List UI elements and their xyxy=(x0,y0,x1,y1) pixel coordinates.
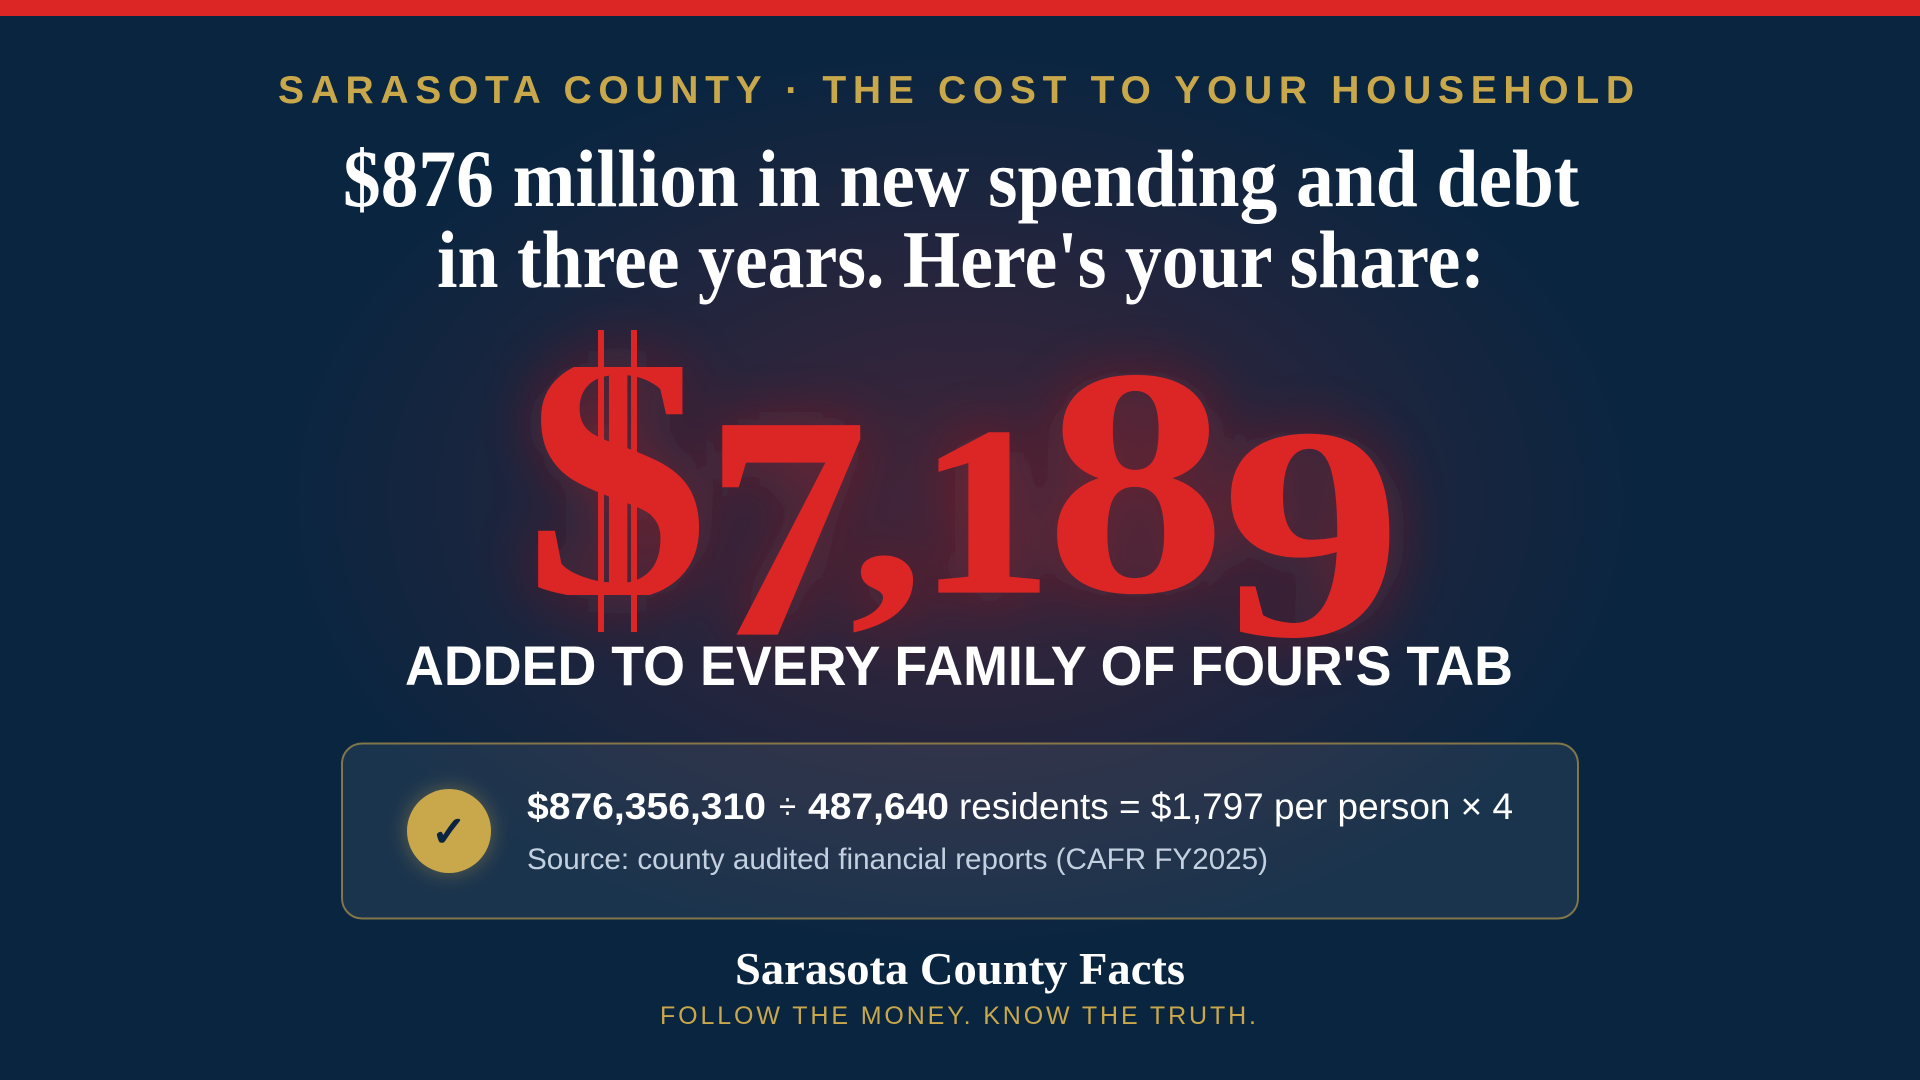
main headline: in three years. Here's your share: xyxy=(437,214,1485,305)
calculation text: 487,640 xyxy=(808,786,949,827)
calculation text: $876,356,310 xyxy=(527,786,766,827)
subheading: ADDED TO EVERY FAMILY OF FOUR'S TAB xyxy=(405,634,1513,697)
eyebrow heading: SARASOTA COUNTY · THE COST TO YOUR HOUSEHOLD xyxy=(278,69,1634,112)
calculation text: residents = $1,797 per person × 4 xyxy=(959,786,1513,827)
big number: $7,189: 7 xyxy=(706,352,867,701)
big number: $7,189: 9 xyxy=(1221,365,1403,701)
calculation text: ÷ xyxy=(779,786,796,827)
icon: gold check badge: ✓ xyxy=(431,807,467,856)
icon: gold check badge xyxy=(407,789,491,873)
big number: $7,189: 1 xyxy=(919,380,1052,643)
card box xyxy=(342,744,1578,918)
big number: $7,189: 8 xyxy=(1045,301,1227,662)
panel: calculation card xyxy=(342,744,1578,918)
big number: $7,189: $ xyxy=(525,275,710,674)
calculation text xyxy=(527,786,1513,827)
footer brand name: Sarasota County Facts xyxy=(735,943,1185,994)
footer tagline: FOLLOW THE MONEY. KNOW THE TRUTH. xyxy=(660,1002,1256,1030)
big number: $7,189 xyxy=(511,326,1422,665)
source note: Source: county audited financial reports (CAFR FY2025) xyxy=(527,843,1268,876)
top red bar xyxy=(0,0,1920,16)
main headline xyxy=(343,133,1579,305)
big number: $7,189: , xyxy=(850,367,925,649)
main headline: $876 million in new spending and debt xyxy=(343,133,1579,224)
